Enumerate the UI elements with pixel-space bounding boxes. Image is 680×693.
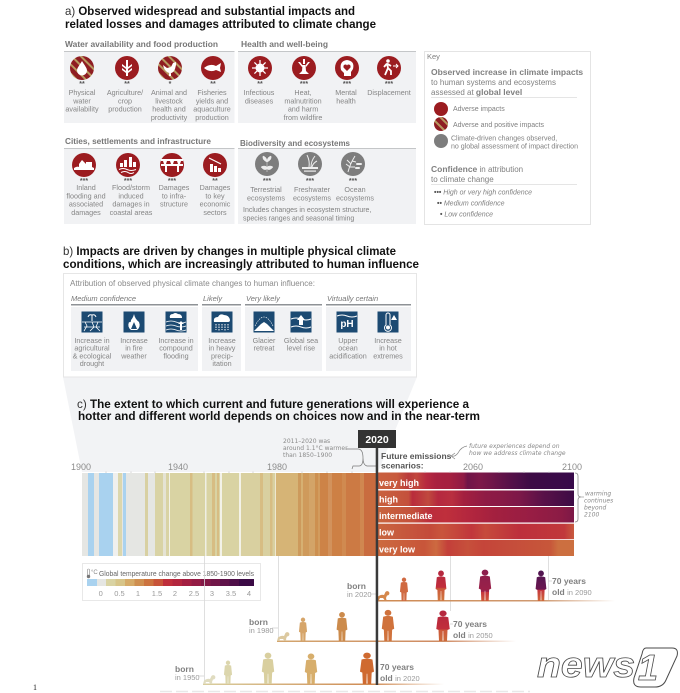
label: fisheries: yields and [196, 96, 228, 105]
generation: born in 1980 [249, 610, 516, 642]
label: terrestrial: Terrestrial [250, 185, 282, 194]
heading: section a: a) Observed widespread and substantial impacts and [65, 4, 355, 18]
label: born in 1950 [175, 664, 204, 682]
labels: attribution indicators: flooding [163, 351, 189, 360]
labels: attribution indicators: Glacier [253, 336, 276, 345]
icon: terrestrial [255, 152, 279, 176]
logo: news1 watermark [537, 644, 677, 688]
annotation: future experiences: how we address climate change [469, 450, 566, 457]
labels: attribution indicators: precip- [211, 351, 234, 360]
key: confidence levels [434, 190, 532, 218]
label: infectious diseases: Infectious [244, 88, 275, 97]
heading: section c: c) The extent to which current and future generations will experience a [77, 397, 469, 411]
icon: infrastructure [160, 153, 184, 177]
label: economic sectors: economic [200, 200, 231, 209]
panel: key: Key [427, 52, 440, 61]
labels: attribution indicators: weather [120, 351, 147, 360]
icon: compound flooding [166, 312, 186, 332]
labels: attribution indicators: compound [159, 344, 193, 353]
confidence stars [263, 178, 357, 185]
heading: section a: related losses and damages attributed to climate change [65, 17, 376, 31]
annotation: warming continues beyond 2100: 2100 [584, 512, 599, 518]
chart: warming stripes 1900-2020 [82, 473, 377, 556]
labels: attribution indicators: Increase in [74, 336, 110, 345]
legend: global temperature change: 0.5 [114, 589, 125, 598]
label: livestock: livestock [155, 96, 183, 105]
label: born in 2020: born [347, 581, 366, 591]
annotation: 2011-2020 warming: around 1.1°C warmer [283, 445, 348, 452]
panel: funnel background linking b to c [63, 377, 417, 472]
icon: inland flooding [72, 153, 96, 177]
label: heat: and harm [288, 105, 318, 114]
label: future emissions scenarios: Future emissions [381, 451, 452, 461]
labels: attribution indicators: Increase [208, 336, 236, 345]
key: confidence heading: Confidence in attribution [431, 164, 523, 174]
label: livestock: productivity [151, 113, 188, 122]
label: freshwater: ecosystems [293, 193, 331, 202]
icon: ocean acidification [336, 312, 358, 332]
timeline marker: 2020: 2020 [365, 434, 389, 446]
heading: section a [65, 4, 376, 31]
confidence stars: *** [343, 81, 351, 88]
heading: section c: hotter and different world depends on choices now and in the near-term [78, 409, 480, 423]
key: climate-driven changes: Climate-driven changes observed, [451, 136, 557, 142]
label: fisheries: Fisheries [197, 88, 227, 97]
note: ecosystem changes: Includes changes in ecosystem structure, [243, 207, 371, 214]
annotation: warming continues beyond 2100: continues [584, 498, 613, 504]
label: agriculture: crop [118, 96, 132, 105]
panel: water availability and food production: Water availability and food production [65, 40, 218, 49]
confidence stars: ** [79, 81, 85, 88]
label: 70 years old in 2020: old in 2020 [380, 673, 420, 683]
legend: global temperature change: 4 [247, 589, 251, 598]
labels: attribution indicators: Upper [338, 336, 358, 345]
scenario: low [378, 524, 574, 539]
scenario: very high [378, 472, 574, 489]
label: physical water availability: availability [65, 105, 99, 114]
sub-panel backgrounds and confidence headings: Likely [203, 294, 223, 303]
label: born in 2020 [347, 581, 376, 599]
label: physical water availability: water [72, 96, 91, 105]
label: heat: malnutrition [284, 96, 322, 105]
confidence stars [80, 178, 218, 185]
icon: glacier retreat [254, 312, 274, 332]
panel: water availability and food production [64, 40, 234, 123]
annotation: warming continues beyond 2100: beyond [584, 504, 607, 512]
scenario: intermediate [378, 507, 574, 522]
icon: fisheries [201, 56, 225, 80]
label: 70 years old in 2050 [450, 619, 493, 640]
confidence stars: *** [385, 81, 393, 88]
axis: years and ticks: 1940 [168, 462, 188, 472]
labels: attribution indicators: acidification [329, 351, 367, 360]
label: fisheries: aquaculture [193, 105, 231, 114]
key: confidence levels: ••• High or very high confidence [434, 190, 532, 196]
panel: key [424, 52, 590, 224]
axis: years and ticks: 1900 [71, 462, 91, 472]
annotation: 2011-2020 warming: 2011–2020 was [283, 438, 330, 445]
icon: drought [82, 312, 102, 332]
panel: attribution of physical climate changes [64, 274, 416, 377]
panel: biodiversity and ecosystems [238, 139, 416, 224]
label: livestock: Animal and [151, 88, 187, 97]
icon: heat malnutrition [292, 56, 316, 80]
confidence stars: *** [306, 178, 314, 185]
label: agriculture: production [108, 105, 142, 114]
label: born in 1950: in 1950 [175, 673, 200, 682]
label: economic sectors: to key [205, 191, 225, 200]
heading: section b [63, 244, 419, 271]
legend: global temperature change: 3.5 [226, 589, 236, 598]
labels: attribution indicators: drought [80, 359, 104, 368]
label: 70 years old in 2020 [380, 662, 420, 683]
label: economic sectors: Damages [200, 183, 231, 192]
heading: section b: conditions, which are increasingly attributed to human influence [63, 257, 419, 271]
labels: attribution indicators: in heavy [209, 344, 236, 353]
icon: freshwater [298, 152, 322, 176]
label: ocean: ecosystems [336, 193, 374, 202]
labels: attribution indicators: itation [212, 359, 232, 368]
key: adverse impacts [434, 102, 505, 116]
key: confidence levels: • Low confidence [440, 212, 493, 218]
icon: sea level rise [290, 312, 312, 332]
scenario: high: high [379, 494, 398, 504]
icon: physical water availability [70, 56, 94, 80]
label: agriculture: Agriculture/ [107, 88, 143, 97]
timeline marker: 2020 [358, 430, 396, 685]
legend: global temperature change: 1.5 [152, 589, 162, 598]
icon: infectious diseases [248, 56, 272, 80]
icon: economic sectors [203, 153, 227, 177]
axis: years and ticks: 2060 [463, 462, 483, 472]
confidence stars: *** [263, 178, 271, 185]
label: ocean: Ocean [344, 185, 366, 194]
key: adverse impacts: Adverse impacts [453, 106, 505, 113]
sub-panel backgrounds and confidence headings: Medium confidence [71, 294, 136, 303]
axis: years and ticks: 1980 [267, 462, 287, 472]
labels: attribution indicators: & ecological [73, 351, 112, 360]
icon: flood storm coastal [116, 153, 140, 177]
annotation: warming continues beyond 2100: warming [585, 490, 611, 498]
panel: biodiversity and ecosystems: Biodiversity and ecosystems [240, 139, 351, 148]
legend: global temperature change: 2.5 [189, 589, 199, 598]
labels: attribution indicators: in fire [125, 344, 143, 353]
generation guide lines [204, 556, 548, 684]
icon: displacement [377, 56, 401, 80]
label: infrastructure: to infra- [162, 191, 187, 200]
legend: global temperature change: 0 [99, 589, 103, 598]
labels: attribution indicators: extremes [373, 351, 403, 360]
scenario: very high: very high [379, 478, 419, 488]
note: ecosystem changes: species ranges and seasonal timing [243, 215, 354, 222]
icon: ocean [341, 152, 365, 176]
confidence stars: ** [257, 81, 263, 88]
label: heat: Heat, [294, 88, 312, 97]
label: coastal damages: coastal areas [110, 208, 153, 217]
label: mental health: health [336, 96, 356, 105]
scenario: very low [378, 540, 574, 556]
legend: global temperature change [82, 564, 260, 600]
label: heat: from wildfire [284, 113, 322, 122]
label: physical water availability: Physical [69, 88, 96, 97]
icon: thermometer: °C [91, 570, 98, 576]
panel: cities, settlements and infrastructure: Cities, settlements and infrastructure [65, 137, 212, 146]
annotation: warming continues beyond 2100 [575, 473, 613, 522]
label: coastal damages: damages in [112, 200, 150, 209]
key: climate-driven changes [434, 134, 578, 150]
sub-panel backgrounds and confidence headings: Virtually certain [327, 294, 378, 303]
annotation: 2011-2020 warming [283, 438, 376, 469]
panel: attribution of physical climate changes: Attribution of observed physical climate changes to human influence: [70, 278, 315, 288]
key heading: to human systems and ecosystems [431, 78, 556, 87]
key: adverse and positive impacts: Adverse and positive impacts [453, 122, 545, 129]
panel: health and well-being [238, 40, 416, 123]
labels: attribution indicators: level rise [287, 344, 315, 353]
confidence stars: *** [349, 178, 357, 185]
confidence stars: *** [168, 178, 176, 185]
label: inland flooding: Inland [76, 183, 96, 192]
labels: attribution indicators: retreat [254, 344, 274, 353]
label: born in 1950: born [175, 664, 194, 674]
key: confidence heading: to climate change [431, 175, 494, 184]
key: climate-driven changes: no global assessment of impact direction [451, 144, 578, 150]
key heading: assessed at [431, 88, 476, 97]
icon: animal livestock [158, 56, 182, 80]
sub-panel backgrounds and confidence headings [71, 294, 411, 371]
icon: hot extremes [378, 312, 398, 332]
label: inland flooding: damages [71, 208, 101, 217]
confidence stars [79, 81, 216, 88]
icon: agriculture crop [115, 56, 139, 80]
confidence stars: ** [212, 178, 218, 185]
legend: global temperature change: 3 [210, 589, 214, 598]
label: infrastructure: structure [160, 200, 188, 209]
labels: attribution indicators: Increase [120, 336, 148, 345]
label: born in 1980 [249, 617, 278, 635]
confidence stars: * [169, 81, 172, 88]
label: born in 1980: born [249, 617, 268, 627]
confidence stars: *** [300, 81, 308, 88]
labels: attribution indicators: in hot [379, 344, 397, 353]
labels: attribution indicators [73, 336, 403, 368]
confidence stars: *** [80, 178, 88, 185]
confidence stars: ** [210, 81, 216, 88]
legend: global temperature change: Global temperature change above 1850-1900 levels [99, 569, 254, 578]
key: adverse and positive impacts [434, 117, 545, 131]
generation: born in 1950 [175, 653, 444, 685]
icon: ocean acidification: pH [340, 319, 354, 330]
confidence stars [257, 81, 393, 88]
label: future emissions scenarios: scenarios: [381, 460, 424, 470]
label: 70 years old in 2050: old in 2050 [453, 630, 493, 640]
confidence stars: ** [124, 81, 130, 88]
label: economic sectors: sectors [203, 208, 227, 217]
sub-panel backgrounds and confidence headings: Very likely [246, 294, 281, 303]
labels: attribution indicators: Increase in [158, 336, 194, 345]
label: infectious diseases: diseases [245, 96, 274, 105]
label: born in 1980: in 1980 [249, 626, 274, 635]
label: coastal damages: Flood/storm [112, 183, 150, 192]
key heading: Observed increase in climate impacts [431, 67, 583, 77]
icon: heavy precipitation [212, 312, 232, 332]
panel: cities, settlements and infrastructure [64, 137, 234, 224]
page number: 1 [33, 683, 37, 692]
labels: attribution indicators: ocean [338, 344, 358, 353]
legend: global temperature change: 2 [173, 589, 177, 598]
label: displacement: Displacement [367, 88, 411, 97]
label: terrestrial: ecosystems [247, 193, 285, 202]
scenario: very low: very low [379, 544, 416, 554]
generation: born in 2020 [347, 570, 615, 602]
label: infrastructure: Damages [159, 183, 190, 192]
annotation: future experiences: future experiences depend on [469, 443, 560, 450]
label: inland flooding: flooding and [66, 191, 106, 200]
icon: thermometer [87, 569, 98, 578]
logo: news1 watermark: 1 [638, 647, 658, 688]
icon: mental health [335, 56, 359, 80]
scenario: high [378, 490, 574, 506]
label: 70 years old in 2090: old in 2090 [552, 587, 592, 597]
logo: news1 watermark: news [537, 644, 635, 685]
axis: years and ticks: 2100 [562, 462, 582, 472]
labels: attribution indicators: agricultural [74, 344, 110, 353]
label: coastal damages: induced [118, 191, 144, 200]
label: 70 years old in 2020: 70 years [380, 662, 414, 672]
icon: fire weather [124, 312, 144, 332]
heading: section c [77, 397, 480, 423]
scenario: low: low [379, 528, 395, 538]
annotation: future experiences [451, 443, 566, 459]
label: fisheries: production [195, 113, 229, 122]
label: mental health: Mental [335, 88, 357, 97]
chart: future emissions scenarios [378, 472, 574, 556]
panel: health and well-being: Health and well-being [241, 40, 328, 49]
labels: attribution indicators: Increase [374, 336, 402, 345]
axis: years and ticks [71, 462, 582, 473]
scenario: intermediate: intermediate [379, 511, 433, 521]
confidence stars: *** [124, 178, 132, 185]
label: 70 years old in 2050: 70 years [453, 619, 487, 629]
key heading: global level [476, 87, 522, 97]
legend: global temperature change: 1 [136, 589, 140, 598]
heading: section b: b) Impacts are driven by changes in multiple physical climate [63, 244, 396, 258]
label: born in 2020: in 2020 [347, 590, 372, 599]
label: freshwater: Freshwater [294, 185, 331, 194]
labels: attribution indicators: Global sea [284, 336, 318, 345]
label: inland flooding: associated [69, 200, 103, 209]
key: confidence levels: •• Medium confidence [437, 200, 505, 208]
label: 70 years old in 2090: 70 years [552, 576, 586, 586]
annotation: 2011-2020 warming: than 1850–1900 [283, 452, 332, 459]
label: livestock: health and [152, 105, 186, 114]
label: 70 years old in 2090 [548, 576, 592, 597]
